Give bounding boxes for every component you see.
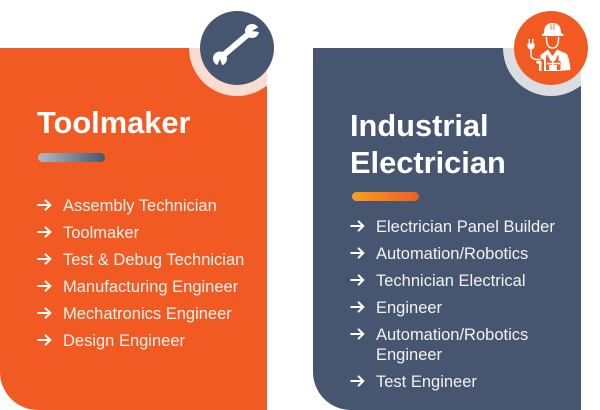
panel: toolmaker xyxy=(0,48,267,410)
item: Automation/Robotics: Automation/Robotics xyxy=(376,245,528,263)
plug and cord xyxy=(529,39,533,44)
item: Design Engineer: Design Engineer xyxy=(63,332,185,350)
item: Automation/Robotics Engineer: Automation/Robotics xyxy=(376,326,528,344)
item: Electrician Panel Builder: Electrician Panel Builder xyxy=(376,218,555,236)
accent bar: toolmaker xyxy=(38,153,105,162)
tool in hand xyxy=(536,61,542,71)
item: Engineer: Engineer xyxy=(376,299,442,317)
panel: industrial electrician xyxy=(313,48,581,410)
item: Mechatronics Engineer: Mechatronics Engineer xyxy=(63,305,232,323)
item: Assembly Technician: Assembly Technician xyxy=(63,197,217,215)
heading: Industrial Electrician: Electrician xyxy=(350,145,506,180)
heading: Industrial Electrician xyxy=(350,108,506,180)
item: Test Engineer: Test Engineer xyxy=(376,373,477,391)
item: Automation/Robotics Engineer: Engineer xyxy=(376,346,442,364)
item: Toolmaker: Toolmaker xyxy=(63,224,139,242)
item: Technician Electrical: Technician Electrical xyxy=(376,272,525,290)
item: Test & Debug Technician: Test & Debug Technician xyxy=(63,251,244,269)
face xyxy=(546,37,558,48)
torso and vest xyxy=(540,50,570,71)
heading: Toolmaker: Toolmaker xyxy=(37,105,190,140)
pale ring behind toolmaker icon xyxy=(189,0,285,96)
item: Manufacturing Engineer: Manufacturing Engineer xyxy=(63,278,238,296)
icon: electrician worker xyxy=(514,11,588,85)
heading: Industrial Electrician: Industrial xyxy=(350,108,489,143)
accent bar: electrician xyxy=(352,192,419,201)
pale ring behind electrician icon xyxy=(503,0,599,96)
hard hat xyxy=(542,23,564,36)
item: Automation/Robotics Engineer xyxy=(350,326,528,364)
icon: wrench xyxy=(200,11,274,85)
list: electrician roles xyxy=(350,218,555,391)
list: toolmaker roles xyxy=(38,197,244,350)
